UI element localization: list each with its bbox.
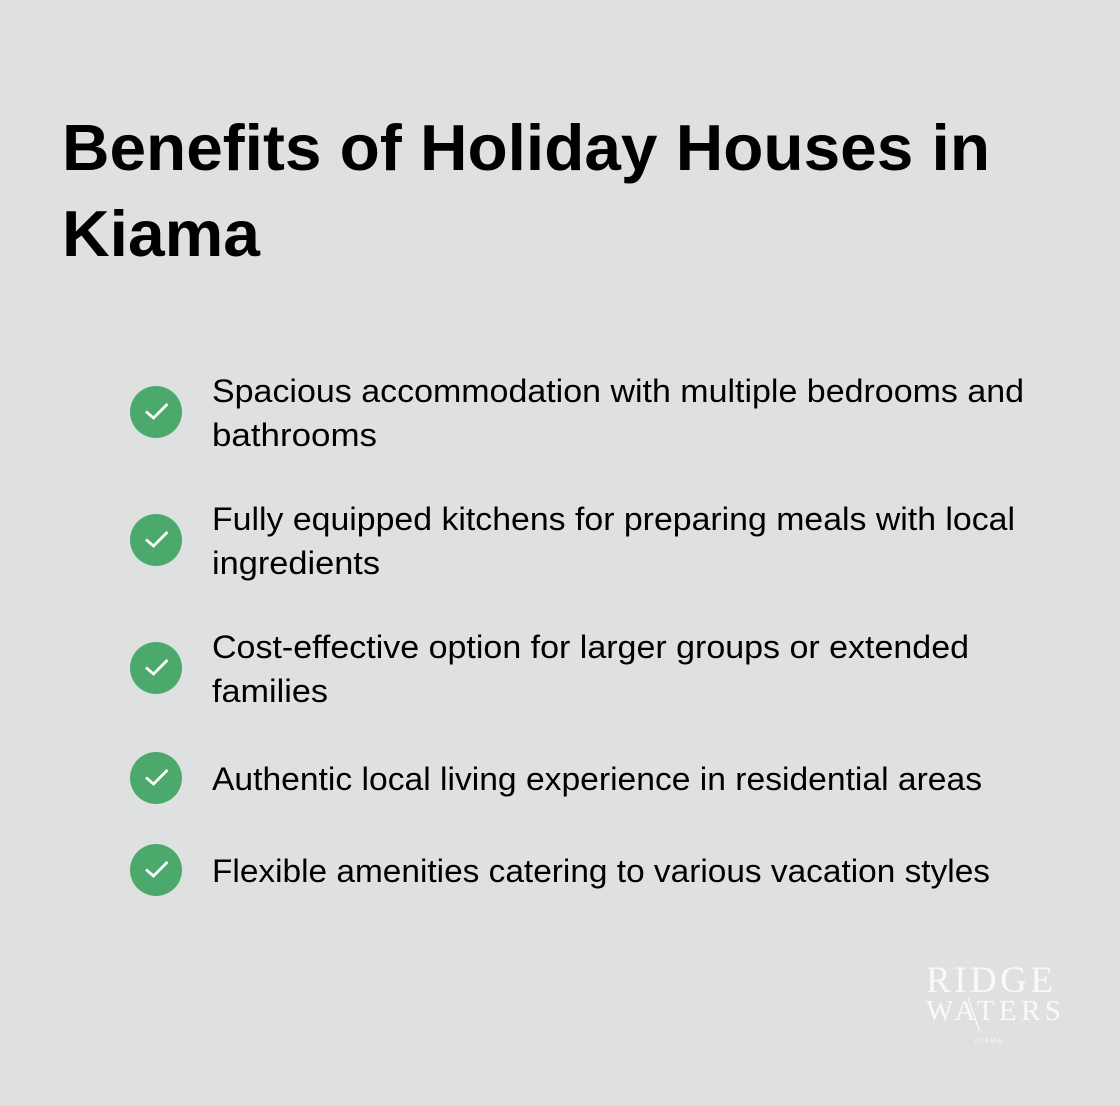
item: equipped kitchens <box>130 501 1015 581</box>
item: flexible amenities <box>130 844 990 896</box>
item: cost-effective: families <box>212 673 328 709</box>
title: Kiama <box>62 197 261 270</box>
item: spacious accommodation <box>130 373 1024 453</box>
logo: Ridge Waters Kiama: WATERS <box>926 995 1061 1027</box>
benefits list <box>130 373 1024 896</box>
logo: Ridge Waters Kiama: RIDGE <box>926 960 1053 1001</box>
logo: Ridge Waters Kiama <box>926 960 1061 1045</box>
item: spacious accommodation: Spacious accommodation with multiple bedrooms and <box>212 373 1024 409</box>
item: equipped kitchens: Fully equipped kitchens for preparing meals with local <box>212 501 1015 537</box>
item: local living <box>130 752 982 804</box>
item: equipped kitchens: ingredients <box>212 545 380 581</box>
item: cost-effective: Cost-effective option for larger groups or extended <box>212 629 969 665</box>
item: flexible amenities: Flexible amenities catering to various vacation styles <box>212 853 990 889</box>
title <box>62 111 990 270</box>
logo: Ridge Waters Kiama: KIAMA <box>975 1038 1003 1045</box>
item: cost-effective <box>130 629 969 709</box>
title: Benefits of Holiday Houses in <box>62 111 990 184</box>
item: local living: Authentic local living experience in residential areas <box>212 761 982 797</box>
item: spacious accommodation: bathrooms <box>212 417 377 453</box>
